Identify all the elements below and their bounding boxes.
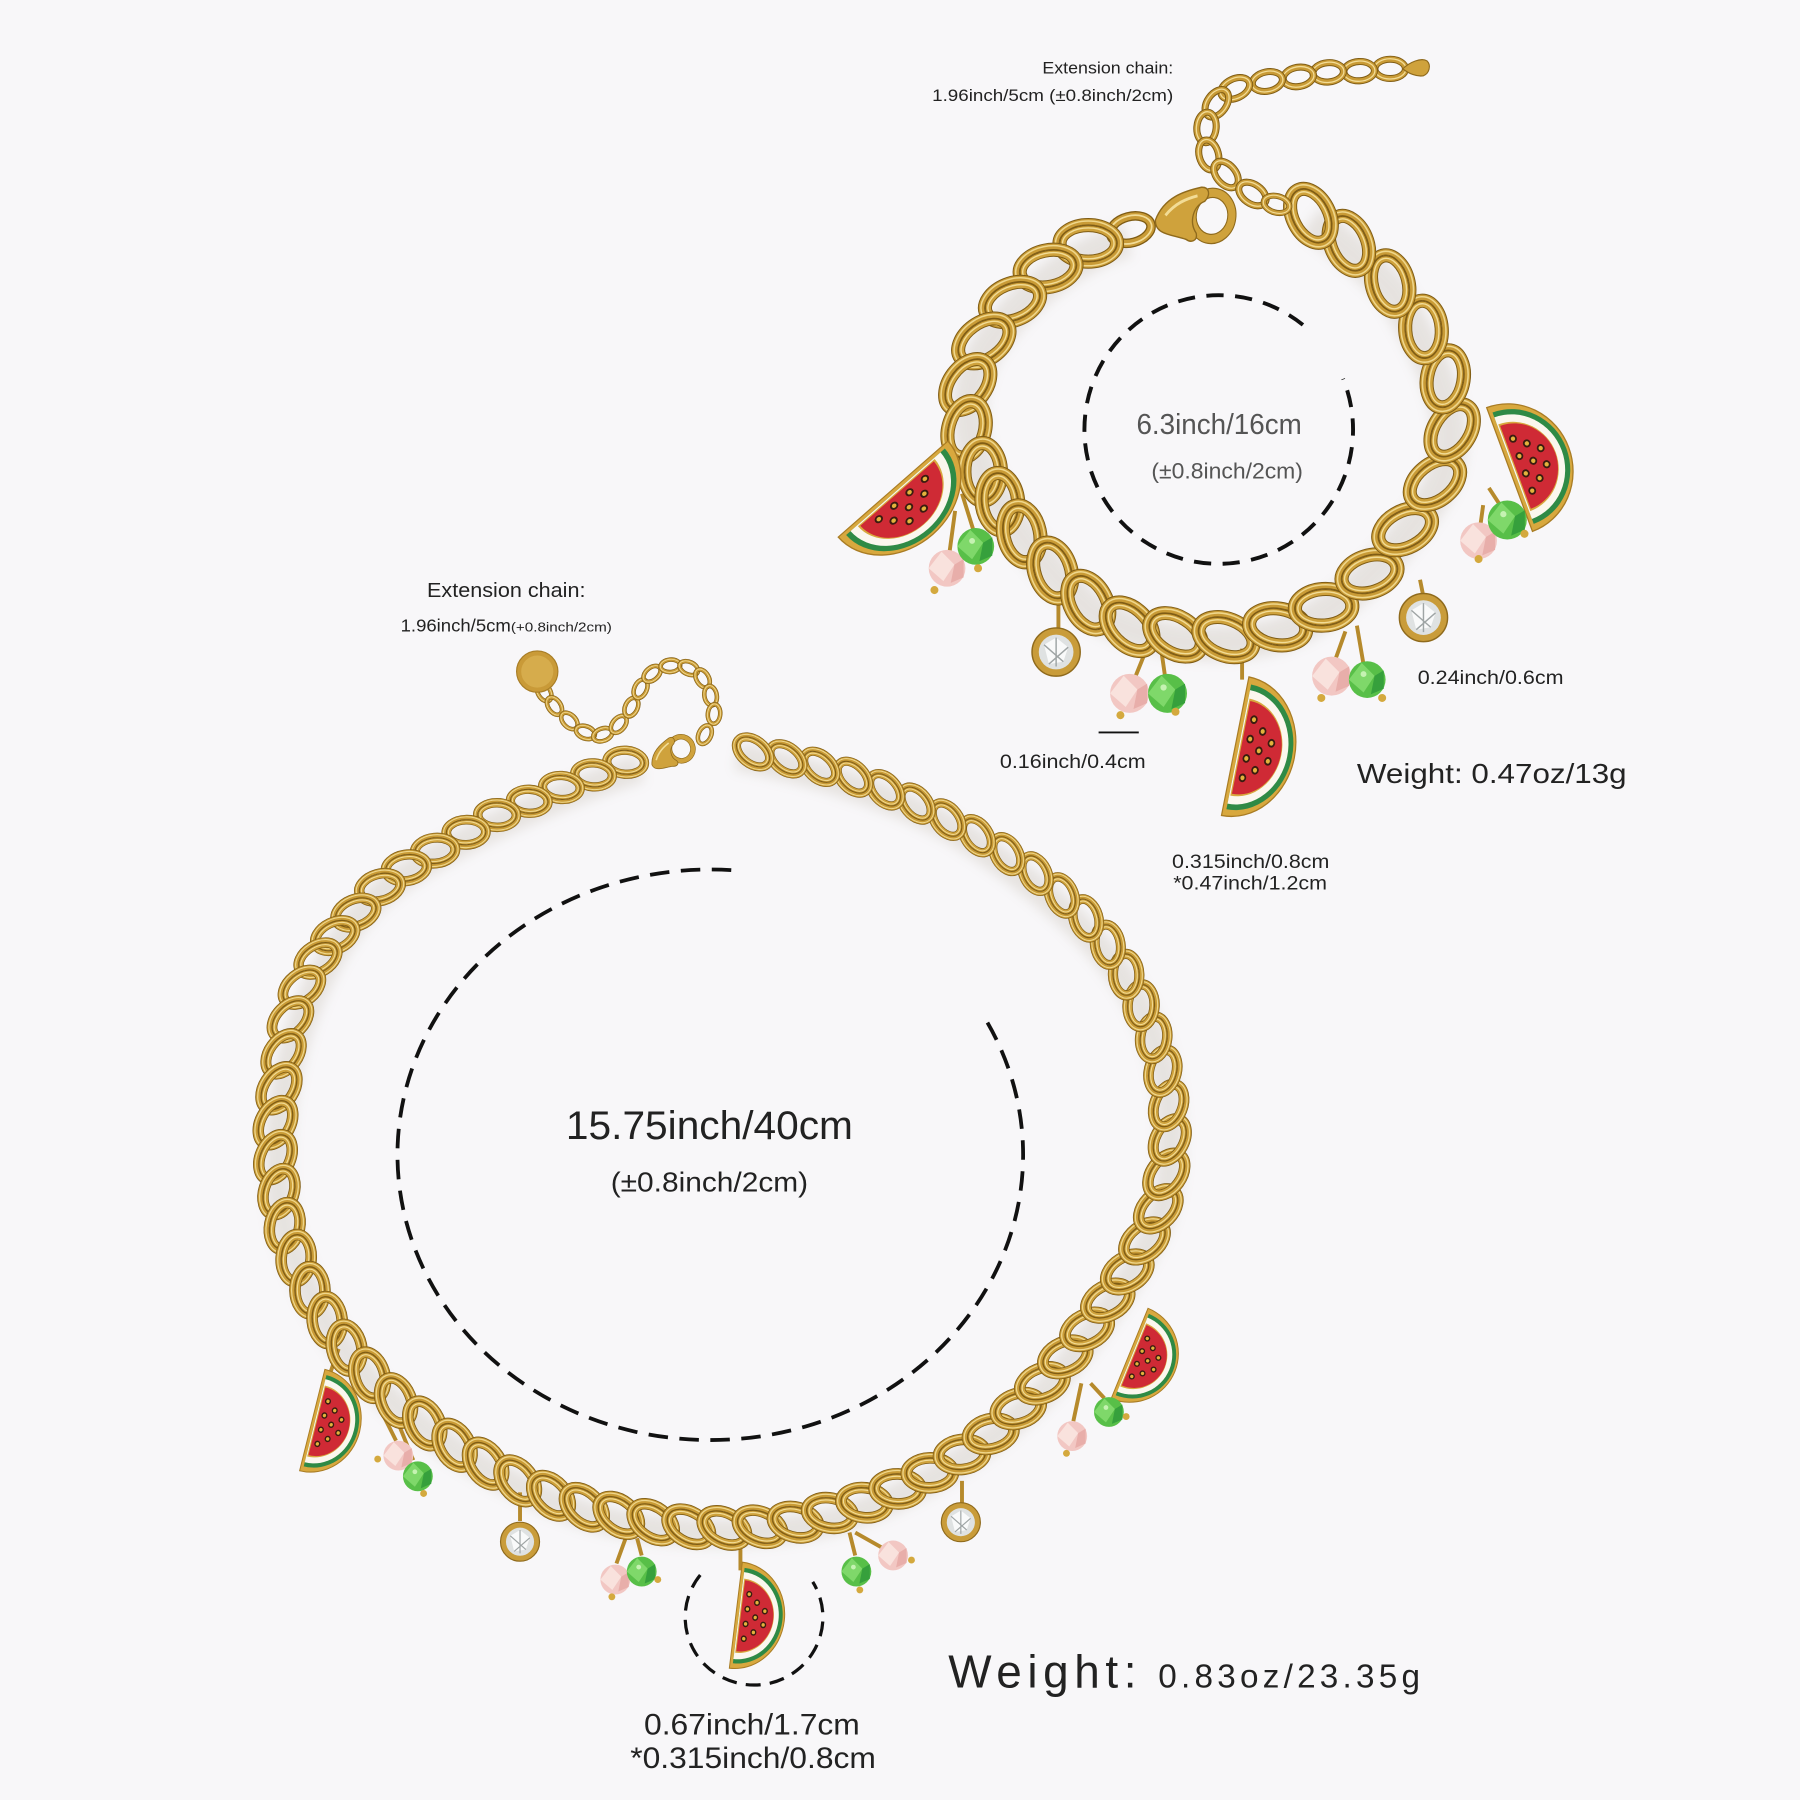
necklace extension chain and tag bbox=[517, 651, 721, 747]
bracelet extension label bbox=[932, 58, 1173, 105]
bracelet extension label: 1.96inch/5cm (±0.8inch/2cm) bbox=[932, 86, 1173, 105]
bracelet extension chain bbox=[1195, 59, 1429, 216]
bracelet length label: 6.3inch/16cm bbox=[1136, 409, 1302, 441]
rhinestone right bbox=[941, 1503, 980, 1542]
necklace extension label bbox=[401, 579, 612, 635]
rhinestone size label: 0.24inch/0.6cm bbox=[1418, 667, 1564, 689]
necklace charm size label bbox=[630, 1709, 876, 1775]
bracelet lobster clasp bbox=[1153, 181, 1235, 246]
charm connectors bbox=[329, 488, 1504, 1570]
necklace extension label: 1.96inch/5cm bbox=[401, 615, 511, 635]
beads centre left bbox=[1110, 674, 1187, 719]
bracelet charms bbox=[838, 386, 1592, 827]
necklace extension label: Extension chain: bbox=[427, 579, 585, 602]
charm dashed circle bbox=[685, 1575, 823, 1685]
beads right bbox=[1460, 501, 1529, 563]
charm: right watermelon bbox=[1111, 1308, 1193, 1417]
necklace lobster clasp bbox=[646, 732, 697, 773]
bracelet dashed length circle bbox=[1084, 295, 1353, 564]
necklace weight bbox=[948, 1646, 1420, 1698]
bracelet charm size label bbox=[1172, 851, 1329, 895]
bracelet charm size label: 0.315inch/0.8cm bbox=[1172, 851, 1329, 873]
necklace length label: 15.75inch/40cm bbox=[566, 1103, 853, 1148]
rhinestone left bbox=[1032, 628, 1080, 676]
rhinestone right bbox=[1399, 593, 1448, 642]
necklace charm size label: 0.67inch/1.7cm bbox=[644, 1709, 860, 1742]
bead size tick bbox=[1099, 731, 1139, 733]
bracelet weight: Weight: 0.47oz/13g bbox=[1357, 758, 1627, 789]
necklace charms bbox=[300, 1308, 1193, 1674]
beads centre right bbox=[1312, 657, 1386, 702]
beads centre right bbox=[841, 1541, 915, 1593]
necklace weight: 0.83oz/23.35g bbox=[1158, 1659, 1420, 1696]
necklace dashed length circle bbox=[397, 870, 1023, 1440]
bracelet charm size label: *0.47inch/1.2cm bbox=[1173, 873, 1327, 895]
necklace extension label: (+0.8inch/2cm) bbox=[511, 620, 612, 634]
bead size label: 0.16inch/0.4cm bbox=[1000, 751, 1146, 773]
necklace chain links bbox=[246, 724, 1200, 1558]
charm: left watermelon bbox=[300, 1369, 372, 1483]
charm: centre watermelon bbox=[729, 1562, 791, 1674]
charm: right watermelon bbox=[1487, 386, 1592, 531]
round logo tag bbox=[517, 651, 558, 692]
beads right bbox=[1057, 1397, 1130, 1457]
charm: centre watermelon bbox=[1221, 677, 1308, 827]
necklace length label bbox=[566, 1103, 853, 1198]
beads left bbox=[929, 528, 994, 594]
bracelet length label: (±0.8inch/2cm) bbox=[1151, 459, 1303, 484]
extension end drop bbox=[1403, 60, 1429, 76]
rhinestone left bbox=[501, 1522, 540, 1561]
necklace charm size label: *0.315inch/0.8cm bbox=[630, 1742, 876, 1775]
bracelet extension label: Extension chain: bbox=[1042, 58, 1173, 77]
charm: left watermelon bbox=[838, 441, 988, 582]
beads centre left bbox=[600, 1557, 661, 1600]
necklace length label: (±0.8inch/2cm) bbox=[611, 1167, 808, 1198]
bracelet length label bbox=[1136, 409, 1303, 484]
chain soft shadows bbox=[278, 220, 1450, 1533]
bracelet chain links bbox=[925, 165, 1491, 674]
beads left bbox=[374, 1441, 433, 1497]
necklace weight: Weight: bbox=[948, 1646, 1136, 1698]
